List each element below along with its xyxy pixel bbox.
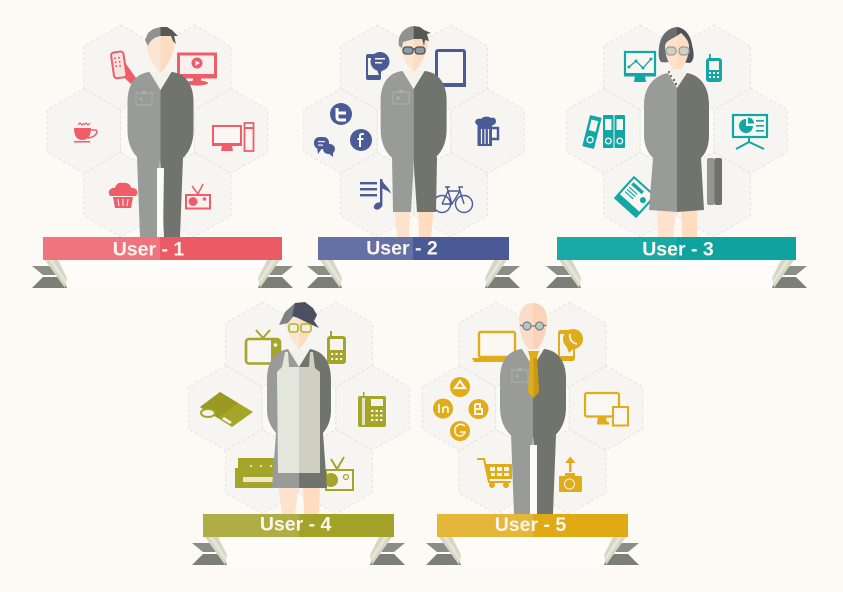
banner: user 4 [192,514,405,567]
hexagon background: user 2 [304,25,524,237]
panel: user 1 [32,25,293,290]
icon: mobile phone [706,54,722,82]
icon: desktop computer [212,123,254,151]
banner: user 2: User - 2 [366,238,438,260]
panel: user 4 [189,302,409,567]
panel: user 2 [304,25,524,290]
icon: phone with chat bubble [366,52,390,80]
icon: binders [582,115,625,149]
icon: set-top box [200,392,253,427]
icon: social circles [433,377,488,441]
icon: laptop [472,332,516,362]
banner: user 3: User - 3 [642,239,714,261]
banner: user 1 [32,237,293,290]
icon: shopping cart [477,459,512,488]
icon: mobile phone [327,331,346,364]
briefcase [707,158,722,205]
icon: remote control [111,51,136,84]
icon: presentation board [733,115,767,149]
hexagon background: user 1 [47,25,268,237]
icon: beer mug [475,117,498,146]
banner: user 5: User - 5 [495,514,566,536]
banner: user 3 [546,237,807,290]
icon: camera upload [559,456,582,492]
icon: television [246,330,280,364]
icon: bicycle [434,187,472,212]
figure: user 2 man in shorts [381,26,447,237]
banner: user 2 [307,237,520,290]
icon: twitter [330,103,352,125]
hexagon background: user 4 [189,302,409,514]
icon: newspaper [614,177,656,218]
icon: monitor with line chart [624,52,656,82]
icon: cupcake [109,183,137,208]
icon: radio [186,184,210,208]
icon: facebook [350,129,372,151]
icon: monitor and tablet [585,393,628,426]
figure: user 3 woman with briefcase [644,27,722,237]
icon: monitor with play button [177,54,217,86]
icon: radio [324,457,353,490]
icon: sofa [235,458,274,488]
icon: music playlist [360,179,391,211]
panel: user 3 [546,25,807,290]
banner: user 1: User - 1 [113,239,184,261]
icon: chat bubbles [314,137,335,157]
banner: user 4: User - 4 [260,514,332,536]
panel: user 5 [422,302,643,567]
figure: user 5 bald man with tie [500,303,566,514]
icon: coffee cup [74,123,97,142]
hexagon background: user 5 [422,302,643,514]
figure: user 1 man in suit [128,27,194,237]
figure: user 4 woman in apron [267,302,331,514]
icon: phone with call bubble [558,329,583,361]
banner: user 5 [426,514,639,567]
icon: landline phone [358,392,386,427]
hexagon background: user 3 [567,25,787,237]
icon: tablet [435,50,466,87]
